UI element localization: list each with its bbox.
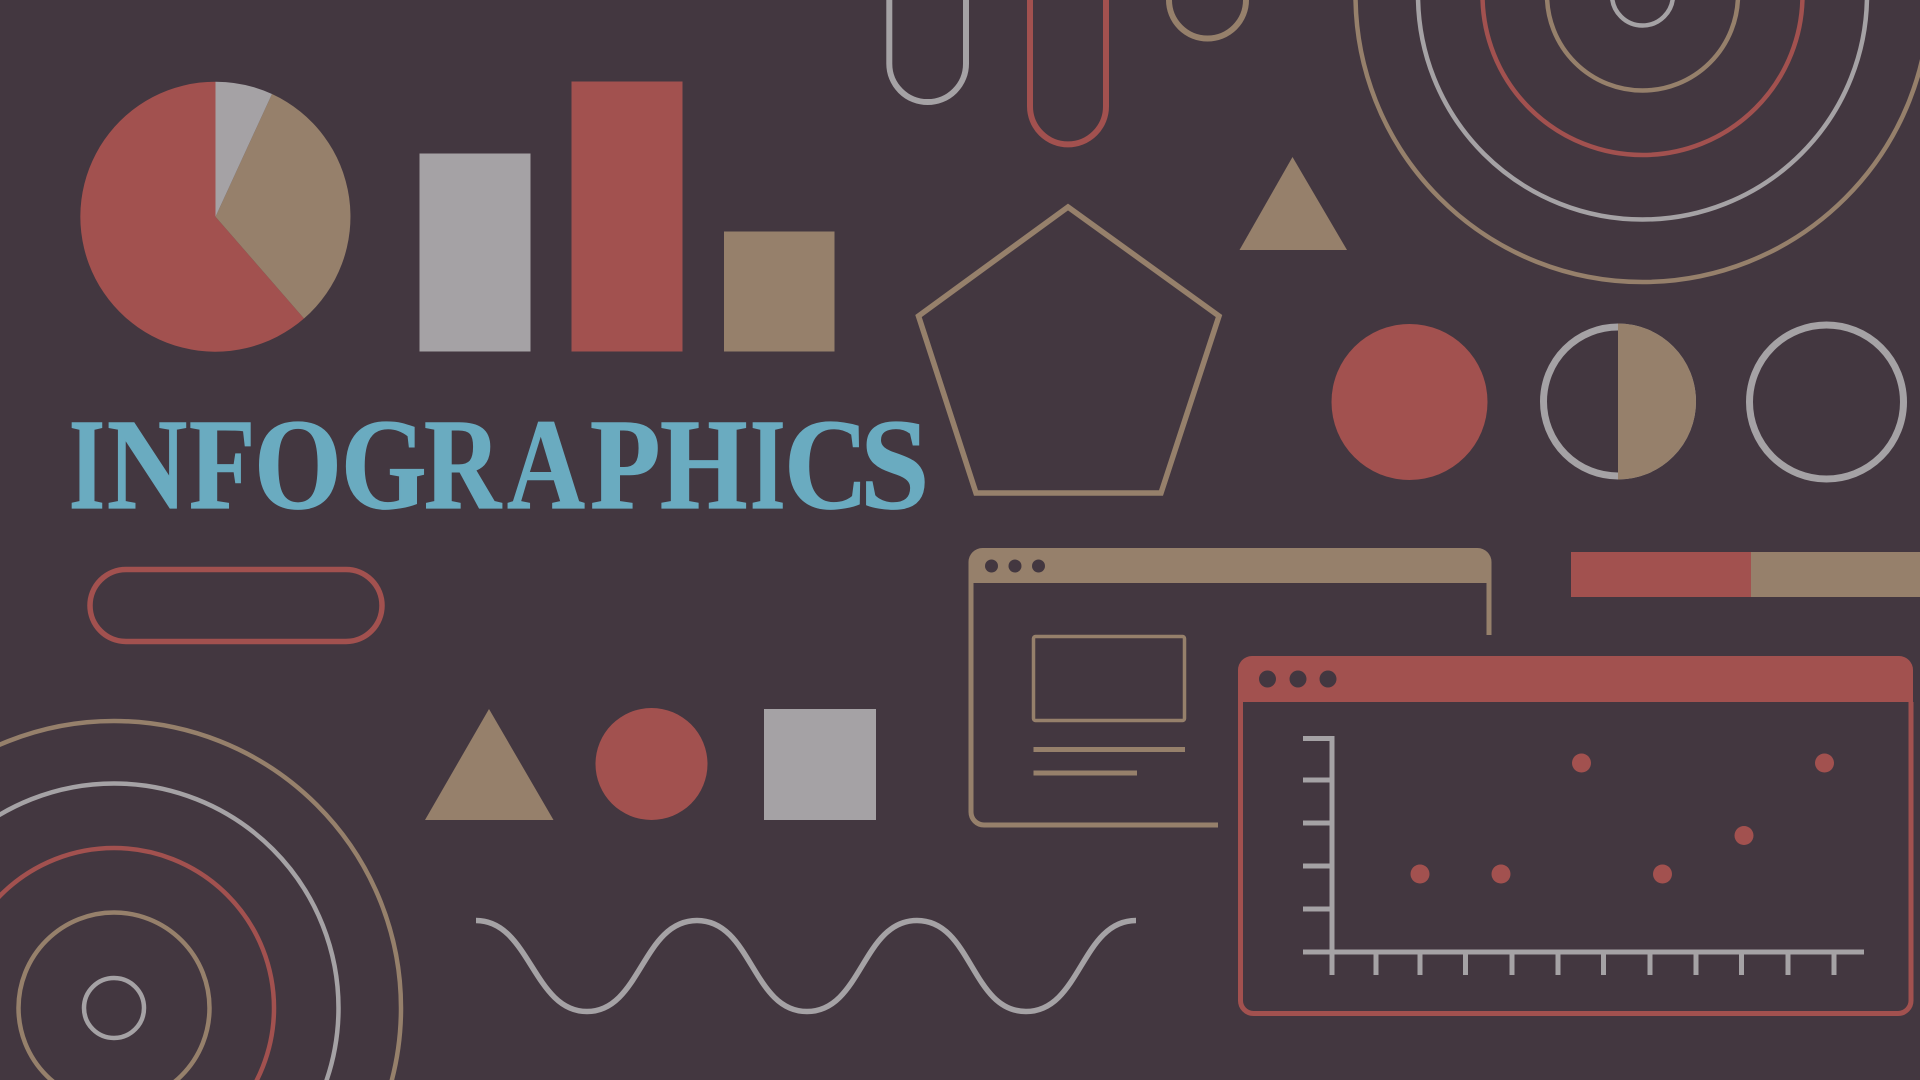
top pill: gray	[889, 0, 966, 102]
bar chart	[420, 82, 834, 352]
axes	[1303, 738, 1864, 975]
top partial circle	[1169, 0, 1246, 38]
top pill: red	[1030, 0, 1106, 144]
half-filled circle	[1544, 324, 1696, 480]
circle	[596, 708, 708, 820]
outlined ring	[1750, 325, 1904, 479]
window: tan	[968, 548, 1492, 825]
concentric circles: top right	[1356, 0, 1920, 282]
outlined pill	[90, 570, 382, 642]
window: scatter chart	[1238, 656, 1913, 1014]
concentric circles: bottom left	[0, 721, 401, 1080]
pie chart	[80, 82, 350, 352]
red circle	[1332, 324, 1488, 480]
pentagon	[918, 207, 1219, 493]
data points	[1410, 754, 1834, 884]
title	[69, 393, 930, 530]
progress bar	[1571, 552, 1920, 597]
triangle	[425, 709, 554, 820]
square	[764, 709, 876, 820]
wave line	[476, 920, 1136, 1012]
small triangle	[1240, 157, 1347, 250]
